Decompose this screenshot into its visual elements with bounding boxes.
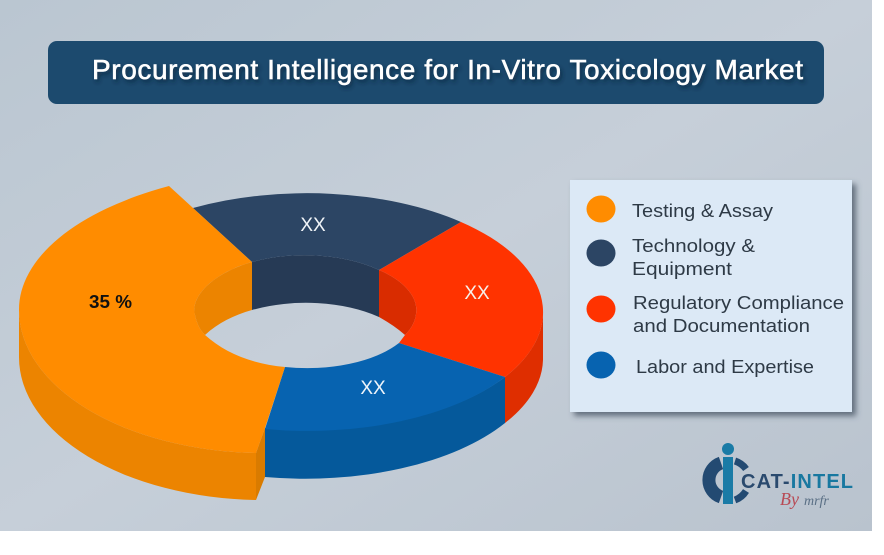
legend item: technology and equipment [586,236,755,279]
slice: technology and equipment [193,193,461,317]
legend item: labor and expertise [586,352,814,378]
legend item: testing and assay [586,196,773,222]
value label: regulatory XX: XX [464,283,490,304]
value label: 35 %: 35 % [89,292,132,312]
legend item: testing and assay: Testing & Assay [632,201,773,221]
icon: C and i mark [709,443,746,504]
logo wordmark: CAT-INTEL [741,471,853,493]
legend item: labor and expertise: Labor and Expertise [636,357,814,377]
legend item: technology and equipment: Technology & [632,236,755,256]
title text: Procurement Intelligence for In-Vitro Toxicology Market [92,54,803,85]
legend item: regulatory compliance and documentation: and Documentation [633,316,810,336]
slice: testing and assay [19,186,285,500]
slice: regulatory compliance and documentation [379,222,543,423]
logo tagline: By mrfr [780,489,829,509]
legend item: regulatory compliance and documentation: Regulatory Compliance [633,293,844,313]
legend item: regulatory compliance and documentation [586,293,844,336]
legend item: technology and equipment: Equipment [632,259,732,279]
value label: labor XX: XX [360,378,386,399]
logo: CAT-INTEL by mrfr [709,443,853,509]
value label: technology XX: XX [300,215,326,236]
3D donut chart [19,186,543,500]
legend panel [570,180,852,412]
slice: labor and expertise [265,343,505,479]
title banner [48,41,824,104]
